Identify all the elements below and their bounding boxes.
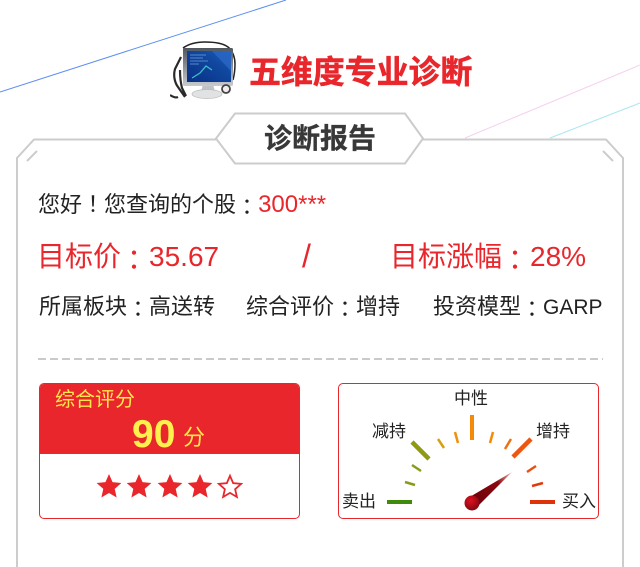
slash: / bbox=[302, 238, 311, 274]
gauge chart bbox=[387, 415, 555, 510]
icon: monitor with stethoscope bbox=[170, 41, 236, 99]
rating: 综合评价：增持 bbox=[246, 292, 400, 324]
score label: 综合评分 bbox=[55, 389, 135, 411]
panel: gauge bbox=[338, 383, 599, 519]
score value: 90 bbox=[132, 413, 175, 456]
panel: composite score bbox=[39, 383, 300, 519]
label: sell: 卖出 bbox=[342, 492, 376, 511]
label: buy: 买入 bbox=[562, 492, 596, 511]
label: reduce: 减持 bbox=[372, 422, 406, 441]
model: 投资模型：GARP bbox=[433, 292, 603, 324]
panel: report frame bbox=[17, 140, 623, 567]
label: increase: 增持 bbox=[536, 422, 570, 441]
heading badge bbox=[214, 112, 424, 164]
target price: 目标价：35.67 bbox=[37, 239, 219, 279]
star rating bbox=[96, 474, 244, 499]
target upside: 目标涨幅：28% bbox=[390, 239, 586, 279]
title: 五维度专业诊断 bbox=[249, 54, 472, 90]
label: neutral: 中性 bbox=[454, 389, 488, 408]
sector: 所属板块：高送转 bbox=[39, 292, 215, 324]
heading: 诊断报告 bbox=[264, 123, 376, 154]
score header bbox=[39, 383, 301, 454]
score unit: 分 bbox=[183, 425, 205, 450]
greeting text: 您好！您查询的个股：300*** bbox=[38, 187, 326, 222]
